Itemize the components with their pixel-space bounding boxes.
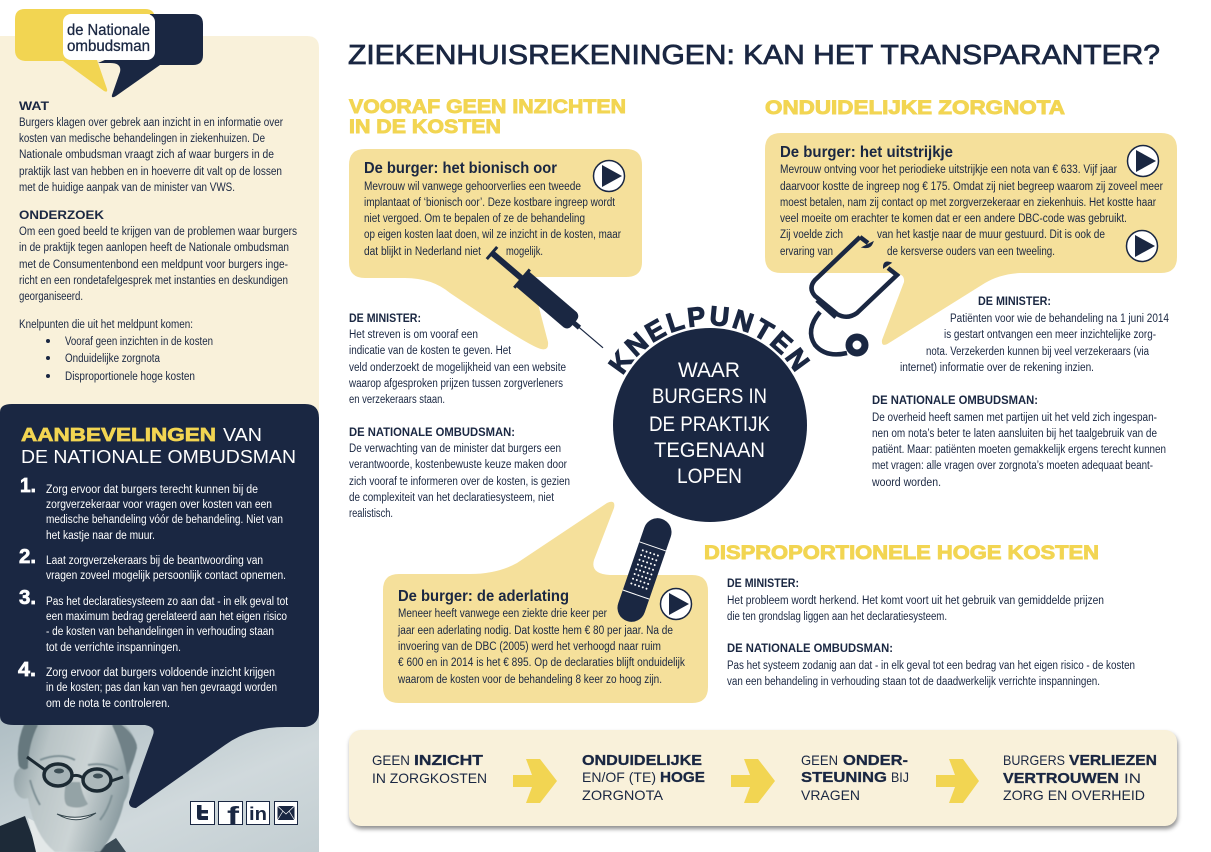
step 4: BURGERS	[1003, 752, 1065, 768]
heading: IN DE KOSTEN	[349, 116, 501, 138]
speech bubble: het bionisch oor: mogelijk.	[506, 246, 543, 258]
step 4: VERLIEZEN	[1069, 753, 1157, 769]
text block: minister: DE MINISTER:	[727, 578, 799, 590]
icon: facebook: f	[227, 802, 240, 830]
recommendation 1: 1.	[20, 475, 36, 497]
step 1: GEEN	[372, 752, 410, 768]
text block: nationale ombudsman: De overheid heeft samen met partijen uit het veld zich ingespan-	[872, 412, 1157, 424]
speech bubble: het bionisch oor: op eigen kosten laat doen, wil ze inzicht in de kosten, maar	[364, 229, 621, 241]
icon: plaster	[614, 514, 675, 626]
text block: minister	[727, 578, 1104, 623]
recommendation 2	[19, 546, 286, 582]
panel: conclusion flow	[349, 730, 1177, 826]
speech bubble: de aderlating: Meneer heeft vanwege een ziekte drie keer per	[398, 608, 607, 620]
speech bubble: het bionisch oor: Mevrouw wil vanwege gehoorverlies een tweede	[364, 181, 581, 193]
text block: minister	[900, 296, 1170, 374]
text block: nationale ombudsman: de complexiteit van het declaratiesysteem, niet	[349, 492, 555, 504]
text block: onderzoek: ONDERZOEK	[19, 210, 105, 222]
heading: DISPROPORTIONELE HOGE KOSTEN	[704, 542, 1099, 564]
recommendation 3: Pas het declaratiesysteem zo aan dat - in elk geval tot	[46, 596, 289, 608]
step 4: IN	[1124, 770, 1141, 786]
recommendation 2: 2.	[19, 546, 36, 568]
speech bubble: het uitstrijkje: Mevrouw ontving voor het periodieke uitstrijkje een nota van € 633. Vijf jaar	[780, 164, 1117, 176]
text block: minister: nota. Verzekerden kunnen bij veel verzekeraars (via	[926, 346, 1150, 358]
step 2: ZORGNOTA	[582, 787, 664, 803]
text block: nationale ombudsman: patiënt. Maar: patiënten moeten gemakkelijk ergens terecht kunnen	[872, 444, 1166, 456]
text block: nationale ombudsman: woord worden.	[871, 477, 941, 489]
recommendation 1	[20, 475, 283, 542]
text block: minister: waarop afgesproken prijzen tussen zorgverleners	[348, 378, 563, 390]
recommendation 4: 4.	[18, 659, 36, 681]
text block: wat	[19, 101, 283, 194]
step 3: STEUNING	[801, 770, 887, 786]
circle text: BURGERS IN	[652, 385, 767, 408]
step 1: IN ZORGKOSTEN	[372, 770, 487, 786]
recommendation 4: in de kosten; pas dan kan van hen gevraagd worden	[46, 682, 277, 694]
icon: linkedin: in	[249, 804, 267, 824]
arrow 3	[936, 759, 979, 803]
icon: mail	[274, 802, 298, 824]
text block: minister: Het probleem wordt herkend. Het komt voort uit het gebruik van gemiddelde prijzen	[727, 595, 1104, 607]
text block: wat: kosten van medische behandelingen in ziekenhuizen. De	[19, 133, 265, 145]
recommendation 3: tot de verrichte inspanningen.	[46, 642, 181, 654]
heading: VOORAF GEEN INZICHTEN	[349, 96, 626, 118]
text block: knelpunten list: Onduidelijke zorgnota	[65, 353, 161, 365]
arrow 2	[731, 759, 775, 803]
photo: portrait of the ombudsman	[0, 715, 319, 852]
recommendation 1: zorgverzekeraar voor vragen over kosten van een	[46, 499, 272, 511]
heading: aanbevelingen van de nationale ombudsman	[21, 424, 296, 467]
text block: knelpunten list: Disproportionele hoge kosten	[65, 371, 195, 383]
speech bubble: het uitstrijkje: de kersverse ouders van een tweeling.	[887, 246, 1055, 258]
icon: play	[660, 588, 692, 620]
central circle: knelpunten	[608, 306, 810, 522]
speech bubble: het uitstrijkje	[765, 133, 1177, 345]
speech bubble: het bionisch oor: dat blijkt in Nederland niet	[364, 246, 482, 258]
section: onduidelijke zorgnota	[765, 97, 1177, 489]
panel: intro sidebar	[0, 9, 319, 420]
text block: nationale ombudsman: verantwoorde, kostenbewuste keuze maken door	[349, 459, 567, 471]
recommendation 4: om de nota te controleren.	[46, 698, 170, 710]
text block: onderzoek: georganiseerd.	[19, 291, 83, 303]
circle text: WAAR	[678, 359, 740, 382]
recommendation 1: Zorg ervoor dat burgers terecht kunnen bij de	[46, 484, 258, 496]
heading: aanbevelingen van de nationale ombudsman: DE NATIONALE OMBUDSMAN	[21, 446, 296, 467]
text block: knelpunten list: Knelpunten die uit het meldpunt komen:	[19, 319, 193, 331]
speech bubble: de aderlating: € 600 en in 2014 is het € 895. Op de declaraties blijft onduidelijk	[398, 657, 685, 669]
text block: nationale ombudsman	[727, 643, 1135, 688]
recommendation 3: - de kosten van behandelingen in verhouding staan	[46, 626, 274, 638]
arrow 1	[513, 759, 557, 803]
text block: minister: Het streven is om vooraf een	[349, 329, 478, 341]
text block: nationale ombudsman: DE NATIONALE OMBUDSMAN:	[349, 427, 515, 439]
recommendation 3: 3.	[19, 587, 36, 609]
text block: nationale ombudsman: DE NATIONALE OMBUDSMAN:	[872, 395, 1038, 407]
title: ZIEKENHUISREKENINGEN: KAN HET TRANSPARANTER?	[348, 39, 1160, 70]
curved heading: knelpunten: KNELPUNTEN	[608, 306, 810, 375]
logo: de Nationale ombudsman: ombudsman	[67, 38, 150, 55]
step 4	[1003, 752, 1157, 803]
icon: syringe	[483, 243, 611, 357]
step 2: ONDUIDELIJKE	[582, 753, 702, 769]
text block: nationale ombudsman: De verwachting van de minister dat burgers een	[349, 443, 561, 455]
step 2: HOGE	[660, 770, 705, 786]
heading: aanbevelingen van de nationale ombudsman: VAN	[223, 424, 262, 445]
recommendation 3: een maximum bedrag gerelateerd aan het eigen risico	[46, 611, 287, 623]
social icons	[190, 802, 298, 830]
text block: onderzoek: richt en een rondetafelgesprek met instanties en deskundigen	[19, 275, 288, 287]
text block: wat: praktijk last van hebben en in hoeverre dit valt op de lossen	[19, 166, 282, 178]
text block: minister: veld onderzoekt de mogelijkheid van een website	[349, 362, 566, 374]
step 2: EN/OF (TE)	[582, 769, 656, 785]
speech bubble: de aderlating: De burger: de aderlating	[398, 588, 569, 605]
text block: minister: DE MINISTER:	[978, 296, 1051, 308]
text block: onderzoek	[19, 210, 297, 303]
text block: nationale ombudsman: zich vooraf te informeren over de kosten, is gezien	[349, 476, 570, 488]
step 3: VRAGEN	[801, 787, 860, 803]
recommendation 2: Laat zorgverzekeraars bij de beantwoording van	[46, 555, 263, 567]
step 3	[801, 752, 909, 803]
section: disproportionele hoge kosten	[383, 502, 1135, 703]
text block: nationale ombudsman: Pas het systeem zodanig aan dat - in elk geval tot een bedrag van het eigen risico - de kosten	[727, 660, 1135, 672]
text block: nationale ombudsman: met vragen: alle vragen over zorgnota’s moeten adequaat beant-	[872, 460, 1153, 472]
text block: nationale ombudsman: van een behandeling in verhouding staan tot de daadwerkelijk verrichte inspanningen.	[727, 676, 1100, 688]
text block: minister: en verzekeraars staan.	[349, 394, 445, 406]
text block: minister: internet) informatie over de rekening inzien.	[900, 362, 1094, 374]
text block: onderzoek: in de praktijk tegen aanlopen heeft de Nationale ombudsman	[19, 242, 289, 254]
text block: nationale ombudsman: DE NATIONALE OMBUDSMAN:	[727, 643, 893, 655]
step 1: INZICHT	[414, 753, 483, 769]
icon: stethoscope	[811, 237, 897, 354]
icon: play top	[1128, 146, 1158, 176]
recommendation 1: medische behandeling vóór de behandeling. Niet van	[46, 514, 283, 526]
text block: onderzoek: met de Consumentenbond een meldpunt voor burgers inge-	[19, 259, 288, 271]
text block: minister: indicatie van de kosten te geven. Het	[349, 345, 512, 357]
speech bubble: de aderlating: waarom de kosten voor de behandeling 8 keer zo hoog zijn.	[397, 674, 662, 686]
icon: play bottom	[1126, 230, 1158, 262]
icon: twitter	[190, 802, 214, 824]
speech bubble: het uitstrijkje: Zij voelde zich	[780, 229, 843, 241]
speech bubble: het uitstrijkje: van het kastje naar de muur gestuurd. Dit is ook de	[877, 229, 1105, 241]
text block: minister: DE MINISTER:	[349, 313, 421, 325]
text block: knelpunten list: Vooraf geen inzichten in de kosten	[65, 336, 213, 348]
recommendation 2: vragen zoveel mogelijk persoonlijk contact opnemen.	[46, 570, 286, 582]
text block: wat: Nationale ombudsman vraagt zich af waar burgers in de	[19, 149, 274, 161]
text block: knelpunten list	[19, 319, 213, 383]
text block: nationale ombudsman	[871, 395, 1166, 489]
text block: wat: Burgers klagen over gebrek aan inzicht in en informatie over	[19, 117, 283, 129]
speech bubble: het uitstrijkje: ervaring van	[780, 246, 833, 258]
speech bubble: de aderlating	[383, 502, 708, 703]
step 3: BIJ	[891, 769, 909, 785]
recommendation 4	[18, 659, 277, 710]
speech bubble: het uitstrijkje: veel moeite om erachter te komen dat er een andere DBC-code was gebruikt.	[780, 213, 1127, 225]
recommendation 4: Zorg ervoor dat burgers voldoende inzicht krijgen	[46, 667, 275, 679]
speech bubble: het bionisch oor: De burger: het bionisch oor	[364, 160, 557, 177]
step 3: GEEN	[801, 752, 838, 768]
step 3: ONDER-	[843, 753, 908, 769]
speech bubble: het bionisch oor: niet vergoed. Om te bepalen of ze de behandeling	[364, 213, 585, 225]
text block: nationale ombudsman: nen om nota’s beter te laten aansluiten bij het taalgebruik van de	[872, 428, 1157, 440]
speech bubble: de aderlating: invoering van de DBC (2005) werd het verhoogd naar ruim	[398, 641, 661, 653]
speech bubble: het uitstrijkje: moest betalen, nam zij contact op met zorgverzekeraar en ziekenhuis. Het kostte haar	[780, 197, 1156, 209]
section: vooraf geen inzichten	[348, 96, 642, 520]
speech bubble: het uitstrijkje: daarvoor kostte de ingreep nog € 175. Omdat zij niet begreep waarom zij zoveel meer	[780, 181, 1163, 193]
circle text	[649, 359, 770, 488]
step 4: VERTROUWEN	[1003, 771, 1119, 787]
circle text: TEGENAAN	[654, 439, 765, 462]
speech bubble: het bionisch oor	[349, 149, 642, 349]
speech bubble: het uitstrijkje: De burger: het uitstrijkje	[780, 144, 953, 161]
text block: onderzoek: Om een goed beeld te krijgen van de problemen waar burgers	[19, 226, 297, 238]
step 2	[582, 753, 705, 803]
heading	[349, 96, 626, 138]
heading: aanbevelingen van de nationale ombudsman: AANBEVELINGEN	[21, 424, 216, 445]
text block: wat: WAT	[19, 101, 49, 113]
panel: aanbevelingen	[0, 404, 319, 808]
text block: minister: is gestart ontvangen een meer inzichtelijke zorg-	[944, 329, 1156, 341]
text block: minister: Patiënten voor wie de behandeling na 1 juni 2014	[950, 313, 1170, 325]
recommendation 1: het kastje naar de muur.	[46, 530, 155, 542]
speech bubble: de aderlating: jaar een aderlating nodig. Dat kostte hem € 80 per jaar. Na de	[397, 625, 673, 637]
heading: ONDUIDELIJKE ZORGNOTA	[765, 97, 1065, 119]
logo: de Nationale ombudsman: de Nationale	[67, 22, 150, 39]
text block: minister	[348, 313, 566, 406]
logo: de Nationale ombudsman	[15, 9, 203, 97]
text block: nationale ombudsman: realistisch.	[349, 508, 393, 520]
text block: wat: met de huidige aanpak van de minister van VWS.	[19, 182, 235, 194]
step 4: ZORG EN OVERHEID	[1003, 787, 1145, 803]
circle text: LOPEN	[677, 465, 742, 488]
circle text: DE PRAKTIJK	[649, 413, 770, 436]
recommendation 3	[19, 587, 289, 654]
speech bubble: het bionisch oor: implantaat of ‘bionisch oor’. Deze kostbare ingreep wordt	[364, 197, 616, 209]
icon: play	[594, 160, 624, 192]
text block: nationale ombudsman	[349, 427, 570, 520]
step 1	[372, 752, 487, 786]
text block: minister: die ten grondslag liggen aan het declaratiesysteem.	[727, 611, 947, 623]
